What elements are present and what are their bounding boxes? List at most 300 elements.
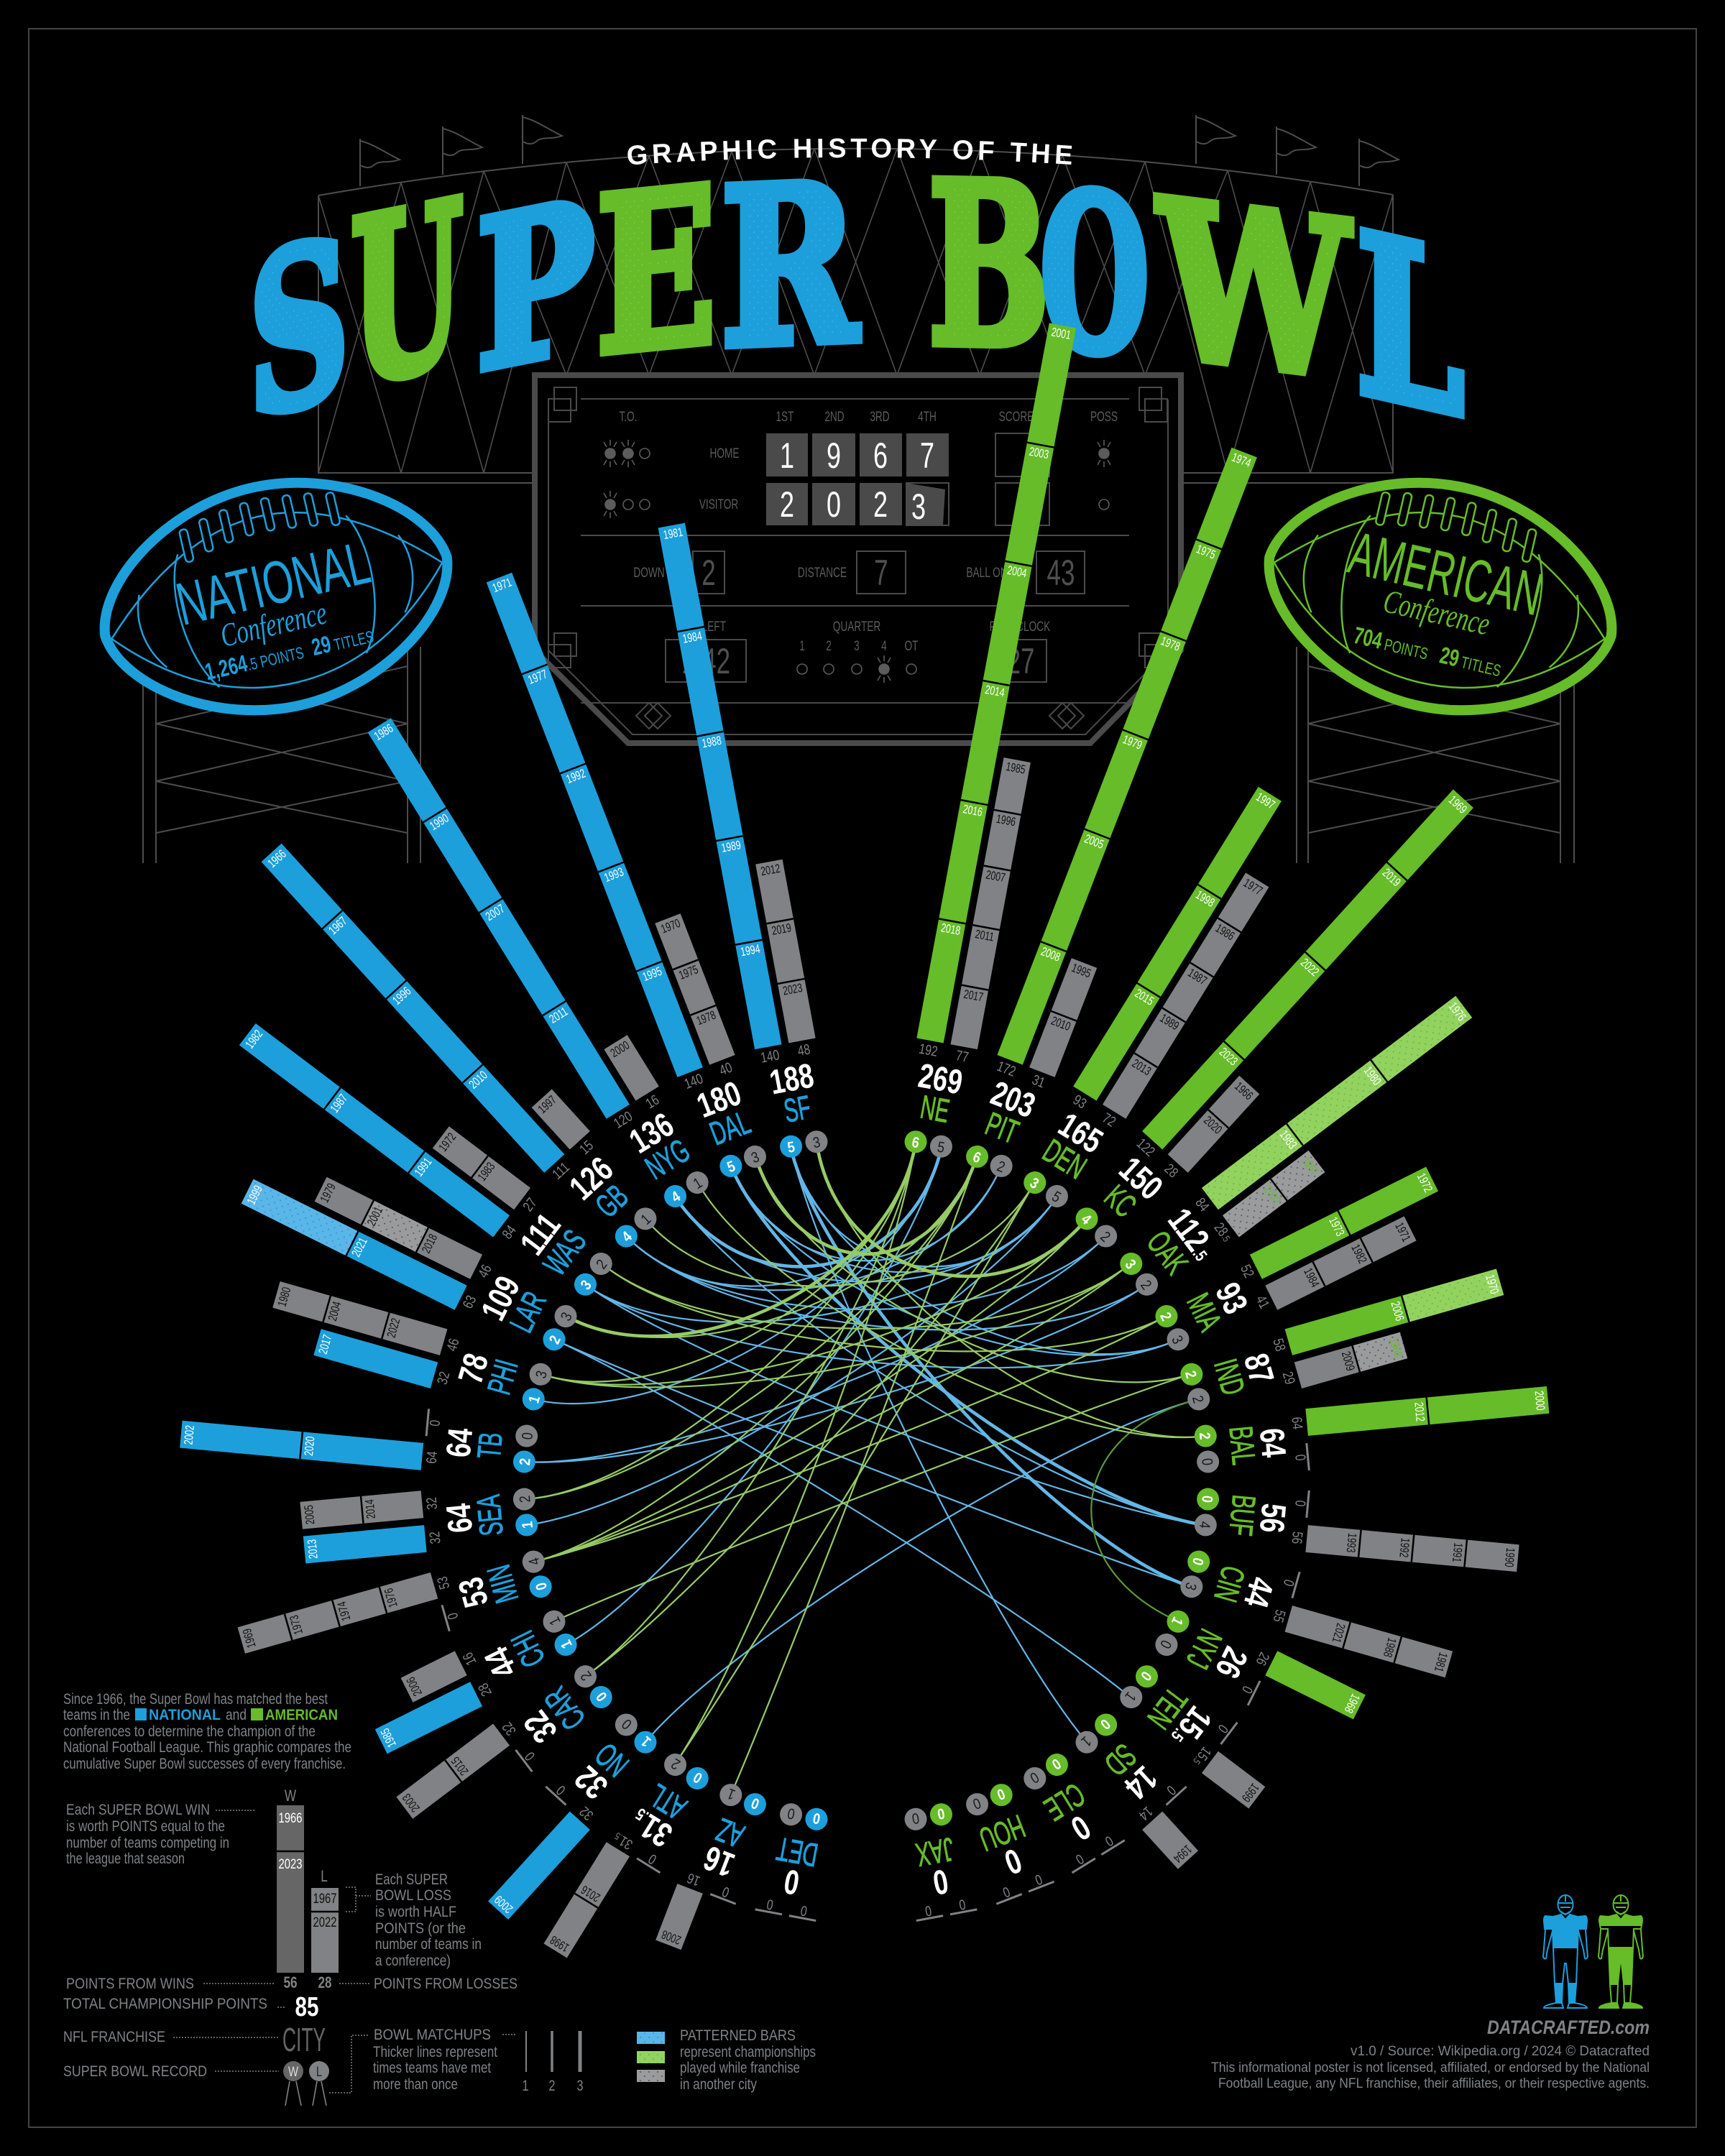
GB wins bar: 2010 (467, 1069, 490, 1092)
NE wins bar: 2018 (940, 921, 962, 939)
WAS losses bar: 1983 (476, 1161, 498, 1184)
bowl matchups explanation: BOWL MATCHUPS (374, 2027, 491, 2043)
CLE points: 0 (1073, 1851, 1087, 1868)
BUF losses bar (1305, 1525, 1519, 1572)
IND points: 29 (1279, 1370, 1298, 1386)
DEN points: 165 (1052, 1105, 1109, 1161)
title: super bowl: L (1356, 184, 1465, 466)
intro text: AMERICAN (265, 1707, 338, 1723)
scoreboard: OT (905, 638, 918, 654)
SEA losses bar: 2014 (364, 1498, 379, 1519)
ATL points: ATL (643, 1777, 693, 1827)
MIN points: 53 (434, 1575, 453, 1591)
JAX record: 0 (936, 1805, 946, 1823)
CHI record: 1 (546, 1614, 564, 1628)
team: PHI (263, 1281, 556, 1419)
HOU points: 0 (1000, 1884, 1012, 1901)
example losses bar: 1967 (313, 1891, 336, 1906)
IND losses bar (1294, 1332, 1407, 1388)
DAL losses bar (655, 913, 735, 1065)
DET points: 0 (765, 1896, 774, 1913)
team: DET (755, 1800, 836, 1921)
scoreboard: 1:42 (681, 642, 730, 682)
CAR points: 32 (516, 1703, 565, 1750)
NYG points: NYG (639, 1132, 696, 1187)
team: LAR (242, 1148, 584, 1360)
flip digits: 9 (827, 436, 841, 476)
super bowl record: SUPER BOWL RECORD (63, 2063, 207, 2080)
example losses bar (311, 1868, 339, 1973)
GB points: 126 (562, 1150, 621, 1208)
MIN points (434, 1556, 527, 1621)
bowl matchups explanation: Thicker lines represent (373, 2044, 497, 2060)
team: HOU (957, 1778, 1054, 1904)
PHI points: PHI (481, 1355, 525, 1399)
scoreboard: 27 (1007, 642, 1034, 682)
points from losses: POINTS FROM LOSSES (374, 1976, 518, 1992)
scoreboard: 2 (826, 638, 832, 654)
MIN points: 0 (444, 1611, 461, 1621)
title: super bowl: E (596, 139, 717, 403)
SF record: 3 (811, 1134, 822, 1152)
NYG wins bar: 1986 (372, 722, 396, 744)
scoreboard: TIME LEFT (676, 619, 726, 635)
PIT wins bar: 2005 (1082, 833, 1105, 852)
WAS losses bar: 1972 (437, 1131, 459, 1154)
intro text: Since 1966, the Super Bowl has matched the best (63, 1691, 328, 1708)
MIA losses bar: 1984 (1301, 1266, 1321, 1290)
MIN losses bar: 1969 (241, 1627, 259, 1649)
NO record (610, 1709, 661, 1758)
ATL record (660, 1749, 713, 1794)
DAL record (717, 1142, 769, 1180)
NYJ points: 0 (1239, 1683, 1256, 1696)
WAS wins bar (239, 1023, 510, 1238)
team: CLE (1013, 1746, 1125, 1874)
PIT points: 203 (985, 1074, 1041, 1125)
KC record: 2 (1097, 1228, 1113, 1245)
CAR points: 32 (499, 1719, 519, 1738)
team: AZ (656, 1778, 776, 1962)
DEN losses bar: 1987 (1185, 967, 1209, 988)
IND points: 87 (1236, 1350, 1282, 1388)
SD points: SD (1097, 1736, 1143, 1783)
example wins bar: W (285, 1787, 296, 1805)
DAL record: 5 (725, 1158, 737, 1176)
GB losses bar (532, 1089, 590, 1150)
disclaimer: Football League, any NFL franchise, their affiliates, or their respective agents. (1218, 2076, 1650, 2091)
TEN record: 0 (1137, 1668, 1155, 1684)
scoreboard (535, 375, 1181, 743)
DEN points: DEN (1036, 1132, 1092, 1187)
JAX points: 0 (930, 1861, 951, 1902)
MIN record: 0 (533, 1580, 551, 1592)
NYG record: 4 (668, 1188, 684, 1206)
DEN record: 3 (1027, 1174, 1042, 1193)
scoreboard: 2ND (824, 409, 845, 425)
BAL record: 0 (1198, 1457, 1215, 1466)
losses explanation: number of teams in (375, 1936, 482, 1953)
BAL points: 64 (1289, 1416, 1306, 1430)
SD points (1090, 1732, 1179, 1824)
patterned bars legend (637, 2027, 816, 2093)
SEA points: SEA (470, 1493, 511, 1537)
DET record: 0 (811, 1809, 822, 1827)
KC points: 150 (1111, 1150, 1170, 1208)
HOU record: 0 (970, 1794, 983, 1812)
NE wins bar: 2016 (962, 803, 983, 819)
scoreboard: QUARTER (833, 619, 880, 635)
LAR points: LAR (503, 1286, 554, 1338)
TB points: 0 (427, 1419, 443, 1427)
MIN losses bar: 1973 (288, 1613, 306, 1636)
CHI record: 1 (558, 1637, 576, 1651)
HOU points: HOU (974, 1807, 1030, 1858)
MIN losses bar (238, 1572, 438, 1654)
GB points: 15 (576, 1137, 597, 1158)
SF losses bar: 2023 (782, 982, 804, 998)
TB record: 2 (517, 1457, 534, 1466)
JAX points (911, 1830, 967, 1920)
wins explanation: number of teams competing in (66, 1835, 229, 1851)
scoreboard: 43 (1047, 553, 1075, 594)
scoreboard: VISITOR (699, 497, 738, 512)
PHI losses bar: 2022 (385, 1317, 403, 1340)
team: JAX (896, 1800, 978, 1921)
MIA points: 52 (1238, 1262, 1257, 1280)
DET empty ticks (755, 1909, 816, 1921)
SF record (778, 1129, 829, 1159)
TB record: 0 (519, 1432, 537, 1440)
KC losses bar: 2020 (1201, 1114, 1224, 1137)
american points and titles: 704 POINTS 29 TITLES (1351, 622, 1504, 682)
title: graphic history of the: GRAPHIC HISTORY OF THE (627, 138, 1072, 165)
IND wins bar (1285, 1269, 1504, 1355)
SEA record: 2 (517, 1495, 534, 1503)
NE losses bar: 1996 (995, 813, 1017, 829)
HOU record (963, 1781, 1016, 1819)
KC losses bar (1168, 1076, 1259, 1173)
BUF points: 0 (1292, 1500, 1309, 1507)
conference script: Conference (1380, 582, 1494, 642)
NYJ record: 0 (1156, 1637, 1174, 1651)
IND losses bar: 1968 (1386, 1337, 1404, 1359)
PHI points: 32 (434, 1370, 453, 1386)
team: IND (1176, 1269, 1513, 1419)
example record circles (283, 2061, 329, 2106)
team: SEA (300, 1480, 539, 1564)
team: MIN (238, 1542, 556, 1687)
NYG wins bar: 1990 (428, 812, 451, 834)
PIT record: 6 (970, 1148, 983, 1167)
WAS points (499, 1194, 594, 1283)
national points and titles: 1,264.5 POINTS29 TITLES (203, 622, 376, 686)
patterned bars legend: played while franchise (680, 2060, 800, 2076)
BAL wins bar: 2000 (1532, 1391, 1547, 1411)
AZ losses bar (656, 1884, 703, 1950)
DAL points: 40 (717, 1059, 735, 1079)
IND points: 58 (1270, 1337, 1289, 1353)
MIA wins bar: 1973 (1326, 1215, 1346, 1238)
wins explanation: the league that season (66, 1851, 185, 1867)
losses explanation: Each SUPER (375, 1871, 448, 1888)
team: WAS (239, 996, 621, 1306)
CIN losses bar: 2021 (1329, 1621, 1347, 1644)
team: CIN (1176, 1542, 1462, 1677)
intro text: cumulative Super Bowl successes of every franchise. (63, 1756, 346, 1772)
OAK losses bar (1223, 1151, 1325, 1238)
IND wins bar: 1970 (1483, 1273, 1501, 1296)
TB wins bar: 2002 (183, 1424, 198, 1445)
KC points: 28 (1162, 1161, 1182, 1181)
PIT wins bar: 1974 (1230, 451, 1253, 471)
ATL record: 0 (690, 1768, 705, 1787)
SD record: 0 (1097, 1715, 1113, 1733)
GB wins bar (262, 844, 564, 1173)
TEN no wins tick (1221, 1723, 1237, 1744)
AZ losses bar: 2008 (660, 1927, 683, 1946)
CLE points: 0 (1064, 1807, 1097, 1848)
NE points: 269 (916, 1056, 965, 1102)
CHI points: 28 (475, 1681, 494, 1699)
DAL points: 180 (691, 1074, 747, 1125)
GB points: GB (589, 1178, 635, 1225)
CIN record (1178, 1548, 1213, 1600)
SF wins bar: 1984 (681, 630, 703, 646)
scoreboard: SCORE (999, 409, 1034, 425)
GB record: 1 (638, 1211, 655, 1228)
JAX points: 0 (957, 1896, 967, 1913)
title: super bowl: W (1156, 152, 1352, 428)
NYG wins bar: 2011 (548, 1005, 571, 1026)
team: PIT (957, 448, 1289, 1183)
DEN wins bar: 1997 (1254, 791, 1277, 812)
scoreboard: PLAY CLOCK (990, 619, 1050, 635)
KC record (1071, 1203, 1122, 1252)
nfl franchise: NFL FRANCHISE (63, 2029, 165, 2045)
BUF no wins tick (1307, 1491, 1309, 1518)
scoreboard: 1ST (776, 409, 794, 425)
IND record (1178, 1360, 1213, 1413)
NE record: 6 (911, 1134, 921, 1152)
AZ record: 0 (749, 1794, 762, 1812)
legend: bar explanation (63, 1787, 816, 2106)
CHI points: CHI (504, 1625, 553, 1673)
team: BAL (1193, 1386, 1552, 1480)
BUF losses bar: 1991 (1449, 1542, 1464, 1563)
HOU record: 0 (995, 1784, 1007, 1803)
PHI points: 78 (451, 1350, 497, 1388)
CLE points: CLE (1038, 1775, 1091, 1828)
CAR record (570, 1661, 617, 1713)
ATL record: 2 (668, 1755, 684, 1773)
NE losses bar: 2011 (974, 928, 995, 944)
TEN points: 15.5 (1164, 1699, 1219, 1754)
scoreboard: BALL ON (966, 565, 1008, 581)
DEN losses bar: 1986 (1213, 922, 1236, 944)
MIA record: 3 (1168, 1333, 1186, 1347)
OAK wins bar: 1976 (1445, 1000, 1468, 1024)
NYJ no losses tick (1248, 1681, 1260, 1705)
DEN points (1035, 1092, 1118, 1187)
DAL record: 3 (749, 1148, 762, 1167)
team: CHI (359, 1600, 584, 1754)
losses explanation: BOWL LOSS (375, 1887, 451, 1904)
MIA record (1151, 1302, 1193, 1355)
KC wins bar: 2019 (1379, 867, 1403, 890)
scoreboard: 7 (874, 553, 888, 594)
team: GB (262, 820, 666, 1256)
example record circles: W (288, 2064, 298, 2079)
BAL no losses tick (1307, 1443, 1309, 1470)
TB points: TB (471, 1431, 510, 1460)
PIT wins bar: 1979 (1121, 733, 1144, 752)
JAX points: 0 (924, 1902, 933, 1920)
CIN points: CIN (1206, 1562, 1252, 1606)
NO points (553, 1732, 642, 1823)
JAX points: JAX (913, 1830, 957, 1873)
NYJ record (1151, 1606, 1193, 1659)
team: MIA (1149, 1167, 1453, 1360)
NO points: 0 (553, 1782, 569, 1798)
team: CAR (396, 1655, 621, 1846)
DEN losses bar (1103, 872, 1269, 1119)
DAL wins bar: 1992 (565, 768, 588, 786)
SF wins bar: 1994 (740, 943, 761, 959)
NYG points: 16 (643, 1092, 662, 1112)
example wins bar: 1966 (279, 1810, 302, 1825)
DAL wins bar (487, 573, 703, 1077)
points from wins: POINTS FROM WINS (66, 1976, 194, 1992)
PIT points: 172 (995, 1058, 1018, 1079)
ATL points (611, 1772, 695, 1868)
disclaimer (1211, 2060, 1650, 2091)
SEA losses bar (300, 1491, 423, 1529)
IND record: 2 (1182, 1369, 1200, 1381)
LAR points: 63 (459, 1293, 479, 1311)
wins explanation (66, 1802, 229, 1867)
team: NO (463, 1705, 666, 1920)
LAR record: 3 (558, 1309, 576, 1324)
LAR losses bar: 2001 (365, 1205, 386, 1228)
SF points: 188 (767, 1056, 816, 1102)
brand: DATACRAFTED.com (1487, 2017, 1650, 2038)
OAK wins bar: 1983 (1276, 1128, 1299, 1152)
team: SD (1066, 1705, 1224, 1869)
BUF record: 0 (1198, 1495, 1215, 1503)
SEA points: 32 (426, 1531, 443, 1544)
team: KC (1066, 789, 1499, 1256)
NYJ points: 26 (1208, 1641, 1255, 1685)
light towers (143, 647, 1574, 863)
stadium outline (318, 115, 1399, 483)
GB wins bar: 1966 (266, 848, 289, 870)
PHI record: 3 (533, 1369, 551, 1381)
BUF points: BUF (1221, 1493, 1262, 1537)
CIN losses bar (1285, 1606, 1453, 1677)
AZ points: 16 (685, 1870, 702, 1889)
CHI losses bar (401, 1651, 467, 1703)
OAK losses bar: 2002 (1261, 1184, 1283, 1207)
PIT wins bar (997, 448, 1257, 1065)
wins explanation: is worth POINTS equal to the (66, 1818, 225, 1835)
BUF points: 56 (1289, 1531, 1306, 1544)
JAX record (903, 1802, 954, 1832)
DEN wins bar (1073, 787, 1282, 1101)
example losses bar: L (321, 1868, 328, 1886)
CAR points: CAR (537, 1680, 593, 1736)
flip digits: 1 (780, 436, 794, 476)
TB points (423, 1419, 511, 1470)
KC record: 4 (1077, 1211, 1095, 1228)
SEA record (512, 1487, 539, 1537)
DAL wins bar: 1993 (602, 866, 625, 885)
scoreboard: DOWN (633, 565, 665, 581)
WAS wins bar: 1982 (244, 1028, 266, 1051)
PHI wins bar: 2017 (317, 1333, 335, 1355)
TEN record (1116, 1661, 1162, 1713)
WAS record: 3 (577, 1277, 595, 1293)
NYJ points (1178, 1619, 1273, 1696)
example wins bar (277, 1787, 304, 1973)
MIN points: MIN (480, 1561, 526, 1607)
CIN no wins tick (1292, 1572, 1300, 1598)
team: NYG (368, 700, 719, 1215)
DET points: 0 (799, 1902, 809, 1920)
CAR record: 2 (577, 1668, 595, 1684)
radial chart (180, 323, 1552, 1976)
credits (1211, 2017, 1650, 2091)
TEN points (1136, 1680, 1231, 1769)
scoreboard: HOME (709, 446, 740, 461)
CAR losses bar: 2003 (400, 1791, 423, 1814)
NE wins bar: 2001 (1050, 326, 1072, 343)
DAL losses bar: 1970 (659, 917, 682, 936)
PIT points: PIT (980, 1105, 1024, 1151)
ATL points: 31.5 (611, 1829, 635, 1853)
bowl matchups explanation (373, 2027, 497, 2093)
example win and loss points: 28 (318, 1974, 332, 1992)
example win and loss points: 56 (283, 1974, 298, 1992)
BAL points (1221, 1416, 1309, 1468)
PIT record (963, 1142, 1016, 1180)
CHI losses bar: 2006 (405, 1674, 425, 1697)
NATIONAL label: NATIONAL (170, 528, 376, 638)
CLE record: 0 (1049, 1755, 1064, 1773)
NO wins bar (488, 1811, 590, 1920)
scoreboard: DISTANCE (798, 565, 847, 581)
NYG losses bar (604, 1035, 659, 1101)
DEN wins bar: 1998 (1193, 888, 1217, 910)
KC points: 122 (1133, 1135, 1158, 1160)
TEN points: 15.5 (1190, 1744, 1215, 1769)
SF points: 48 (796, 1041, 811, 1059)
OAK points (1136, 1192, 1236, 1286)
MIA losses bar: 1982 (1348, 1243, 1368, 1266)
LAR losses bar (315, 1177, 482, 1279)
SF losses bar: 2012 (760, 862, 781, 879)
example record circles: L (316, 2064, 322, 2079)
line thickness samples: 2 (548, 2077, 556, 2093)
SEA losses bar: 2005 (303, 1504, 318, 1525)
DEN points: 93 (1070, 1092, 1090, 1112)
player icons (1543, 1895, 1643, 2008)
SD points: 14 (1117, 1758, 1164, 1807)
title: super bowl: R (720, 137, 860, 397)
ball seams and laces (88, 462, 461, 721)
DEN points: 72 (1100, 1110, 1118, 1130)
CAR points (499, 1678, 593, 1764)
